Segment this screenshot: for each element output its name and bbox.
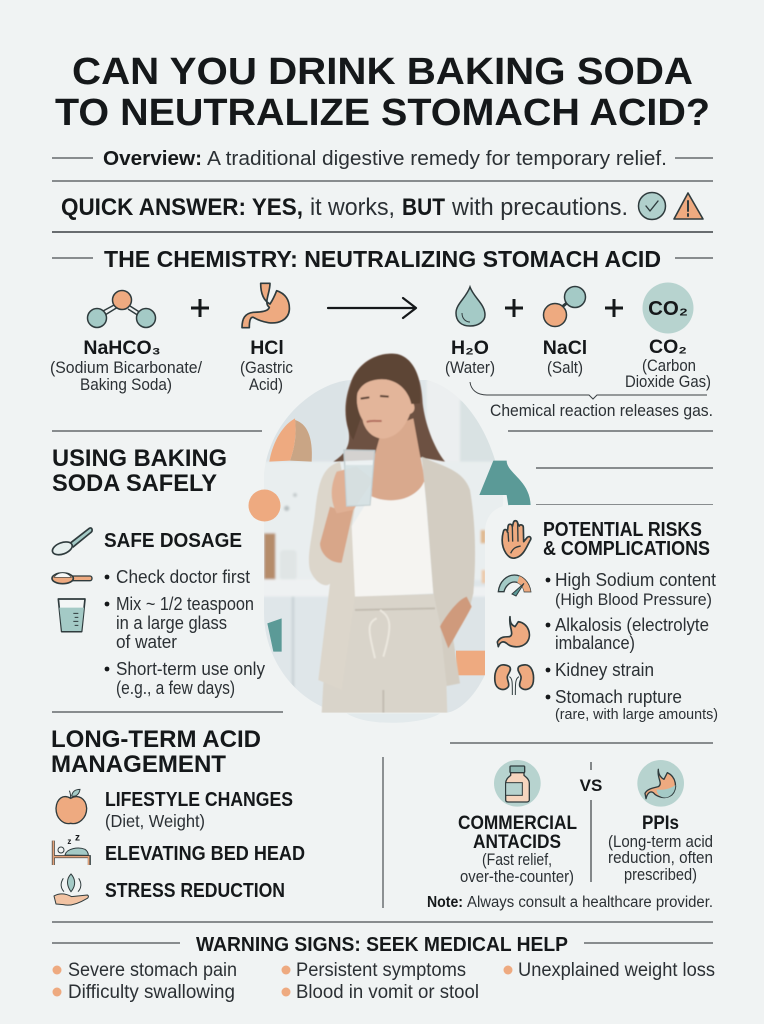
panel: lifestyle list: ELEVATING BED HEAD (105, 843, 305, 865)
bullet list: Alkalosis (electrolyte (555, 615, 709, 635)
gas note: Chemical reaction releases gas. (490, 401, 713, 420)
bullet list: (rare, with large amounts) (555, 706, 718, 723)
plus (605, 299, 623, 317)
icon: gauge (498, 575, 531, 596)
overview line (52, 148, 713, 170)
icon: hand (502, 521, 531, 558)
warning list: Unexplained weight loss (518, 960, 715, 981)
label: NaHCO3: NaHCO₃ (83, 337, 161, 359)
panel: antacids vs PPIs: ANTACIDS (473, 831, 561, 853)
heading: long-term acid management: MANAGEMENT (51, 751, 226, 778)
right forearm (440, 597, 472, 648)
icon: stomach (242, 283, 289, 328)
icon: stomach (497, 617, 529, 647)
overview line: A traditional digestive remedy for temporary relief. (207, 148, 667, 170)
face (357, 378, 414, 439)
panel: antacids vs PPIs: (Fast relief, (482, 851, 552, 869)
quick answer: QUICK ANSWER: YES, (61, 194, 303, 221)
kitchen background (264, 380, 495, 712)
raised forearm (320, 507, 353, 563)
label: CO2: CO₂ (649, 336, 687, 358)
eyes and mouth (361, 396, 389, 399)
note: Note: (427, 894, 463, 911)
warning list: Persistent symptoms (296, 960, 466, 981)
subheading: POTENTIAL RISKS (543, 519, 702, 541)
hand (331, 469, 356, 513)
reaction bracket (470, 382, 707, 399)
bullet list: imbalance) (555, 633, 635, 653)
panel: lifestyle list (53, 789, 305, 905)
cardigan left (309, 462, 355, 690)
vs divider (580, 762, 602, 882)
panel: potential risks (495, 519, 718, 723)
label: CO2 (625, 336, 711, 391)
panel: antacids vs PPIs: reduction, often (608, 849, 713, 867)
quick answer: with precautions. (451, 194, 628, 221)
label: H2O (445, 337, 495, 377)
bullet list: Stomach rupture (555, 687, 682, 707)
icon: apple (56, 789, 87, 824)
label: H2O: (Water) (445, 358, 495, 377)
neck and chest (372, 418, 425, 501)
panel: lifestyle list: LIFESTYLE CHANGES (105, 789, 293, 811)
label: NaCl (543, 337, 587, 377)
label: HCl: Acid) (249, 375, 283, 394)
decor shape: peach block (456, 650, 485, 676)
heading: long-term acid management (51, 726, 261, 778)
icon: antacid bottle (494, 760, 541, 807)
panel: antacids vs PPIs: COMMERCIAL (458, 812, 577, 834)
subheading: SAFE DOSAGE (104, 530, 242, 552)
note: Always consult a healthcare provider. (467, 894, 713, 911)
bottom fade (347, 713, 440, 723)
icon: kidneys (495, 665, 534, 695)
panel: warning signs (52, 934, 715, 1003)
quick answer: it works, (310, 194, 395, 221)
panel backing: risks (485, 505, 764, 724)
panel: lifestyle list: STRESS REDUCTION (105, 880, 285, 902)
arrow: reaction (328, 298, 416, 318)
bullet list: High Sodium content (555, 570, 716, 590)
decor shape: teal corner (479, 461, 531, 506)
icon: CO2 circle: CO₂ (648, 297, 688, 320)
label: H2O: H₂O (451, 337, 489, 359)
warning list: Severe stomach pain (68, 960, 237, 981)
bullet list: in a large glass (116, 613, 227, 633)
hair back (333, 354, 445, 462)
heading: WARNING SIGNS: SEEK MEDICAL HELP (196, 934, 568, 956)
quick answer: BUT (402, 194, 445, 221)
vs divider: VS (580, 776, 602, 795)
label: CO2: (Carbon (642, 356, 696, 375)
title: CAN YOU DRINK BAKING SODA (72, 51, 693, 93)
panel: antacids vs PPIs: over-the-counter) (460, 868, 574, 886)
woman (309, 354, 475, 713)
label: HCl: (Gastric (240, 358, 293, 377)
icon: salt molecule (544, 286, 586, 326)
tank top (352, 482, 433, 597)
heading: long-term acid management: LONG-TERM ACID (51, 726, 261, 753)
panel: antacids vs PPIs (427, 760, 713, 911)
icon: spoon (51, 528, 92, 557)
bullet list (105, 567, 265, 698)
water glass (344, 450, 375, 506)
label: NaHCO3: Baking Soda) (80, 375, 172, 394)
photo: woman drinking water in a kitchen (260, 354, 531, 723)
bullet list: (High Blood Pressure) (555, 590, 712, 609)
icon: hand with leaf (54, 874, 88, 905)
icon: bed (53, 833, 89, 865)
panel: antacids vs PPIs: (Long-term acid (608, 833, 713, 851)
decor shape: tan panel (290, 420, 312, 462)
chemistry heading: THE CHEMISTRY: NEUTRALIZING STOMACH ACID (104, 246, 661, 272)
icon: measuring spoon (52, 573, 92, 584)
panel: safe dosage (51, 528, 265, 698)
heading: using baking soda safely: SODA SAFELY (52, 470, 217, 497)
icon: warning triangle (674, 193, 703, 219)
bullet list: Kidney strain (555, 660, 654, 680)
heading: using baking soda safely (52, 445, 227, 497)
label: NaCl: (Salt) (547, 358, 583, 377)
cardigan right (422, 457, 475, 686)
decor: peach circle (248, 490, 280, 522)
label: NaCl: NaCl (543, 337, 587, 359)
icon: check circle (638, 192, 666, 220)
panel: antacids vs PPIs: prescribed) (624, 866, 697, 884)
bullet list: (e.g., a few days) (116, 678, 235, 698)
label: NaHCO3: (Sodium Bicarbonate/ (50, 358, 202, 377)
label: HCl: HCl (250, 337, 284, 359)
decor shape: peach leaf (269, 418, 296, 462)
overview line: Overview: (103, 148, 202, 170)
icon: bed: z (75, 833, 80, 844)
plus (191, 299, 209, 317)
icon: water drop (456, 287, 485, 326)
icon: PPI stomach (637, 760, 684, 807)
label: NaHCO3 (50, 337, 202, 394)
decor shape: small teal (267, 618, 282, 652)
pants (322, 594, 447, 713)
icon: CO2 circle (642, 282, 694, 334)
warning list (52, 960, 715, 1003)
bullet list: Short-term use only (116, 659, 265, 679)
bullet list: Mix ~ 1/2 teaspoon (116, 594, 254, 614)
panel: lifestyle list: (Diet, Weight) (105, 811, 205, 831)
panel: antacids vs PPIs: PPIs (642, 812, 679, 834)
title: TO NEUTRALIZE STOMACH ACID? (55, 92, 710, 134)
title (55, 51, 710, 134)
icon: baking soda molecule (88, 290, 156, 328)
icon: measuring glass (58, 599, 85, 632)
warning list: Blood in vomit or stool (296, 982, 479, 1003)
label: CO2: Dioxide Gas) (625, 372, 711, 391)
bullet list (546, 570, 718, 723)
bullet list: of water (116, 632, 177, 652)
icon: bed: z (67, 837, 71, 846)
plus (505, 299, 523, 317)
heading: using baking soda safely: USING BAKING (52, 445, 227, 472)
label: HCl (240, 337, 293, 394)
warning list: Difficulty swallowing (68, 982, 235, 1003)
quick answer (61, 194, 628, 221)
bullet list: Check doctor first (116, 567, 250, 587)
panel: potential risks: & COMPLICATIONS (543, 538, 710, 560)
hair front (347, 354, 420, 440)
